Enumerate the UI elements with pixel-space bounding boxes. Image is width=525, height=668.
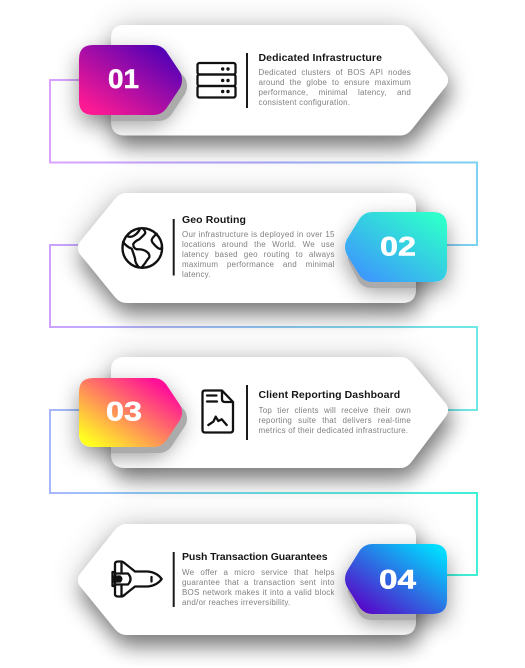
badge 4 cast shadow: [348, 588, 416, 620]
heading: Client Reporting Dashboard: [258, 389, 400, 401]
body text: locations around the World. We use: [182, 240, 335, 249]
body text: [182, 230, 335, 281]
badge 2 soft shadow: [345, 212, 447, 282]
body text: metrics of their dedicated infrastructure.: [258, 426, 408, 435]
card 4 shape: [78, 524, 416, 635]
icon: signed document: [202, 390, 233, 432]
badge 3 cast shadow: [111, 406, 187, 453]
panel: push transaction guarantees: [78, 524, 447, 635]
badge 4 soft shadow: [345, 544, 447, 614]
badge 03: 03: [106, 396, 142, 426]
badge 3 soft shadow: [79, 378, 182, 447]
body text: [182, 568, 335, 609]
badge 2 cast shadow: [348, 256, 416, 288]
panel: client reporting dashboard: [79, 357, 448, 468]
badge 02: [345, 212, 447, 282]
body text: around the globe to ensure maximum: [258, 78, 411, 87]
body text: Dedicated clusters of BOS API nodes: [258, 68, 411, 77]
badge 02: 02: [380, 232, 416, 262]
body text: Top tier clients will receive their own: [258, 406, 411, 415]
heading: Push Transaction Guarantees: [182, 551, 328, 563]
badge 01: 01: [108, 64, 139, 94]
body text: [258, 68, 411, 109]
rule: [173, 552, 175, 607]
body text: and/or reaches irreversibility.: [182, 598, 290, 607]
rule: [246, 53, 248, 108]
body text: consistent configuration.: [258, 98, 350, 107]
panel: dedicated infrastructure: [79, 25, 448, 136]
connector: step 1 to step 2: [50, 80, 477, 245]
badge 04: [345, 544, 447, 614]
card 1 shape: [111, 25, 448, 136]
body text: [258, 406, 411, 437]
icon: space shuttle: [112, 562, 162, 596]
body text: Our infrastructure is deployed in over 15: [182, 230, 335, 239]
icon: globe: [122, 228, 162, 268]
body text: BOS network makes it into a valid block: [182, 588, 335, 597]
body text: performance, minimal latency, and: [258, 88, 411, 97]
body text: maximum performance and minimal: [182, 260, 335, 269]
badge 1 soft shadow: [79, 45, 182, 115]
body text: We offer a micro service that helps: [182, 568, 335, 577]
panel: geo routing: [78, 193, 447, 303]
rule: [246, 385, 248, 440]
badge 01: [79, 45, 182, 115]
body text: latency based geo routing to always: [182, 250, 335, 259]
card 3 shape: [111, 357, 448, 468]
body text: reporting suite that delivers real-time: [258, 416, 411, 425]
infographic canvas: [49, 10, 478, 662]
badge 1 cast shadow: [111, 72, 187, 121]
connector: step 2 to step 3: [50, 245, 477, 410]
body text: latency.: [182, 270, 211, 279]
heading: Dedicated Infrastructure: [258, 52, 382, 64]
rule: [173, 219, 175, 276]
connector: step 3 to step 4: [50, 410, 477, 575]
icon: server rack: [198, 63, 236, 98]
heading: Geo Routing: [182, 214, 246, 226]
badge 04: 04: [379, 564, 416, 594]
card 2 shape: [78, 193, 416, 303]
badge 03: [79, 378, 182, 447]
